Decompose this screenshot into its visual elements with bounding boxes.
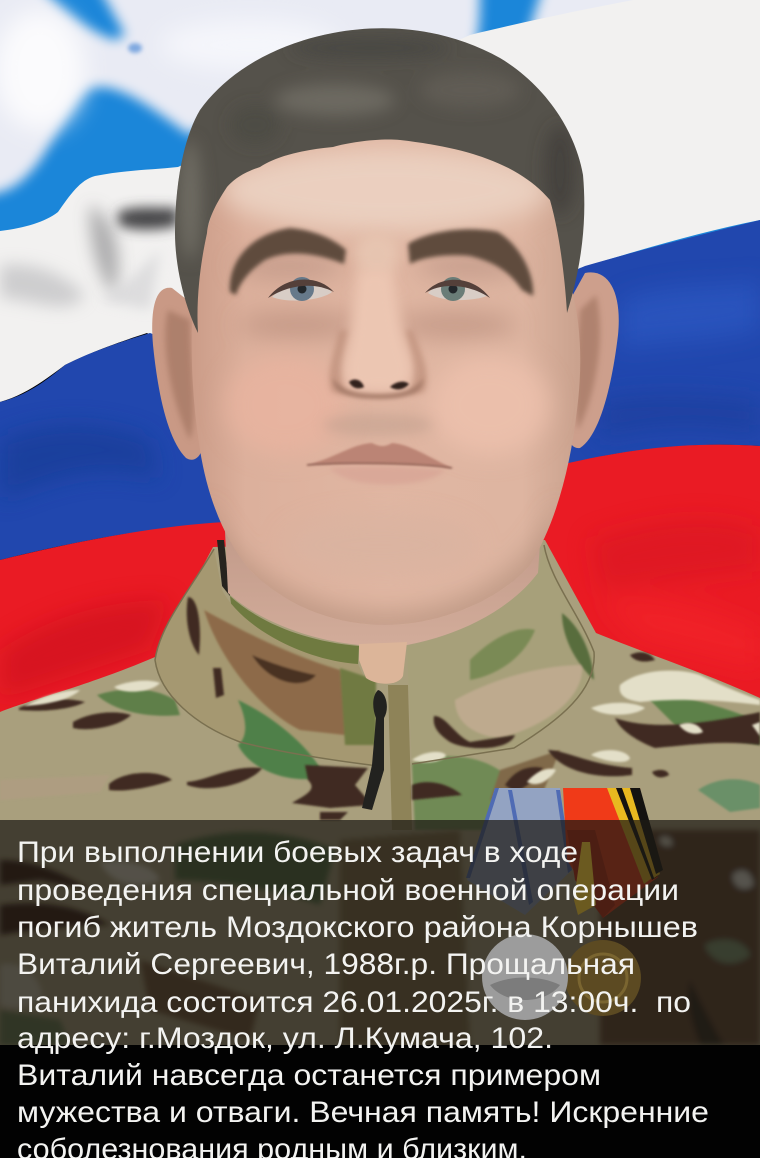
collar right panel — [407, 545, 594, 764]
knit collar band — [230, 596, 359, 666]
small St George bar — [574, 842, 596, 915]
ear: left — [152, 288, 205, 460]
eyebrow: right — [408, 229, 533, 296]
face — [192, 130, 580, 625]
gold medal — [565, 940, 641, 1016]
sky background — [0, 0, 760, 300]
ear: right — [565, 272, 619, 448]
caption text: проведения специальной военной операции — [17, 874, 679, 907]
face shading — [205, 148, 560, 640]
caption text: Виталий навсегда останется примером — [17, 1059, 601, 1092]
lower jacket camouflage, seen through the caption band — [0, 830, 760, 1045]
jacket body — [0, 540, 760, 1158]
light camouflage patches — [24, 671, 760, 784]
flag: white stripe shading — [0, 205, 178, 310]
caption text: Виталий Сергеевич, 1988г.р. Прощальная — [17, 948, 635, 981]
bottom black band — [0, 1045, 760, 1158]
collar camouflage — [0, 610, 760, 830]
hair — [175, 28, 584, 333]
flag: white stripe — [0, 0, 760, 420]
dark camouflage patches — [19, 597, 760, 820]
portrait — [152, 28, 619, 640]
mouth — [307, 443, 452, 485]
caption text: мужества и отваги. Вечная память! Искренние — [17, 1096, 709, 1129]
caption text: При выполнении боевых задач в ходе — [17, 836, 578, 869]
collar edge — [155, 545, 594, 766]
flag: red stripe shading — [0, 519, 760, 700]
medal ribbon: blue — [466, 788, 572, 915]
camouflage jacket — [0, 470, 760, 1158]
zipper placket — [388, 685, 412, 830]
medal ribbon: red and St George stripes — [563, 788, 663, 918]
ear shadows — [165, 295, 600, 440]
neck — [223, 470, 545, 645]
zipper pull — [362, 690, 387, 810]
caption text — [17, 836, 709, 1158]
caption text: панихида состоится 26.01.2025г. в 13:00ч. по — [17, 986, 691, 1019]
dark inner collar — [217, 540, 230, 596]
collar tab — [359, 642, 407, 684]
eyebrow: left — [230, 228, 346, 295]
flag: blue stripe — [0, 220, 760, 560]
caption text: адресу: г.Моздок, ул. Л.Кумача, 102. — [17, 1022, 553, 1055]
nose — [330, 270, 427, 399]
hair texture — [179, 38, 576, 260]
collar left panel — [155, 549, 378, 766]
caption shade — [0, 820, 760, 1045]
caption text: погиб житель Моздокского района Корнышев — [17, 911, 698, 944]
flag: blue stripe shading — [0, 280, 760, 500]
eye: left — [268, 277, 334, 301]
silver medal — [482, 934, 568, 1020]
eye: right — [425, 277, 490, 301]
flag: red stripe — [0, 445, 760, 780]
